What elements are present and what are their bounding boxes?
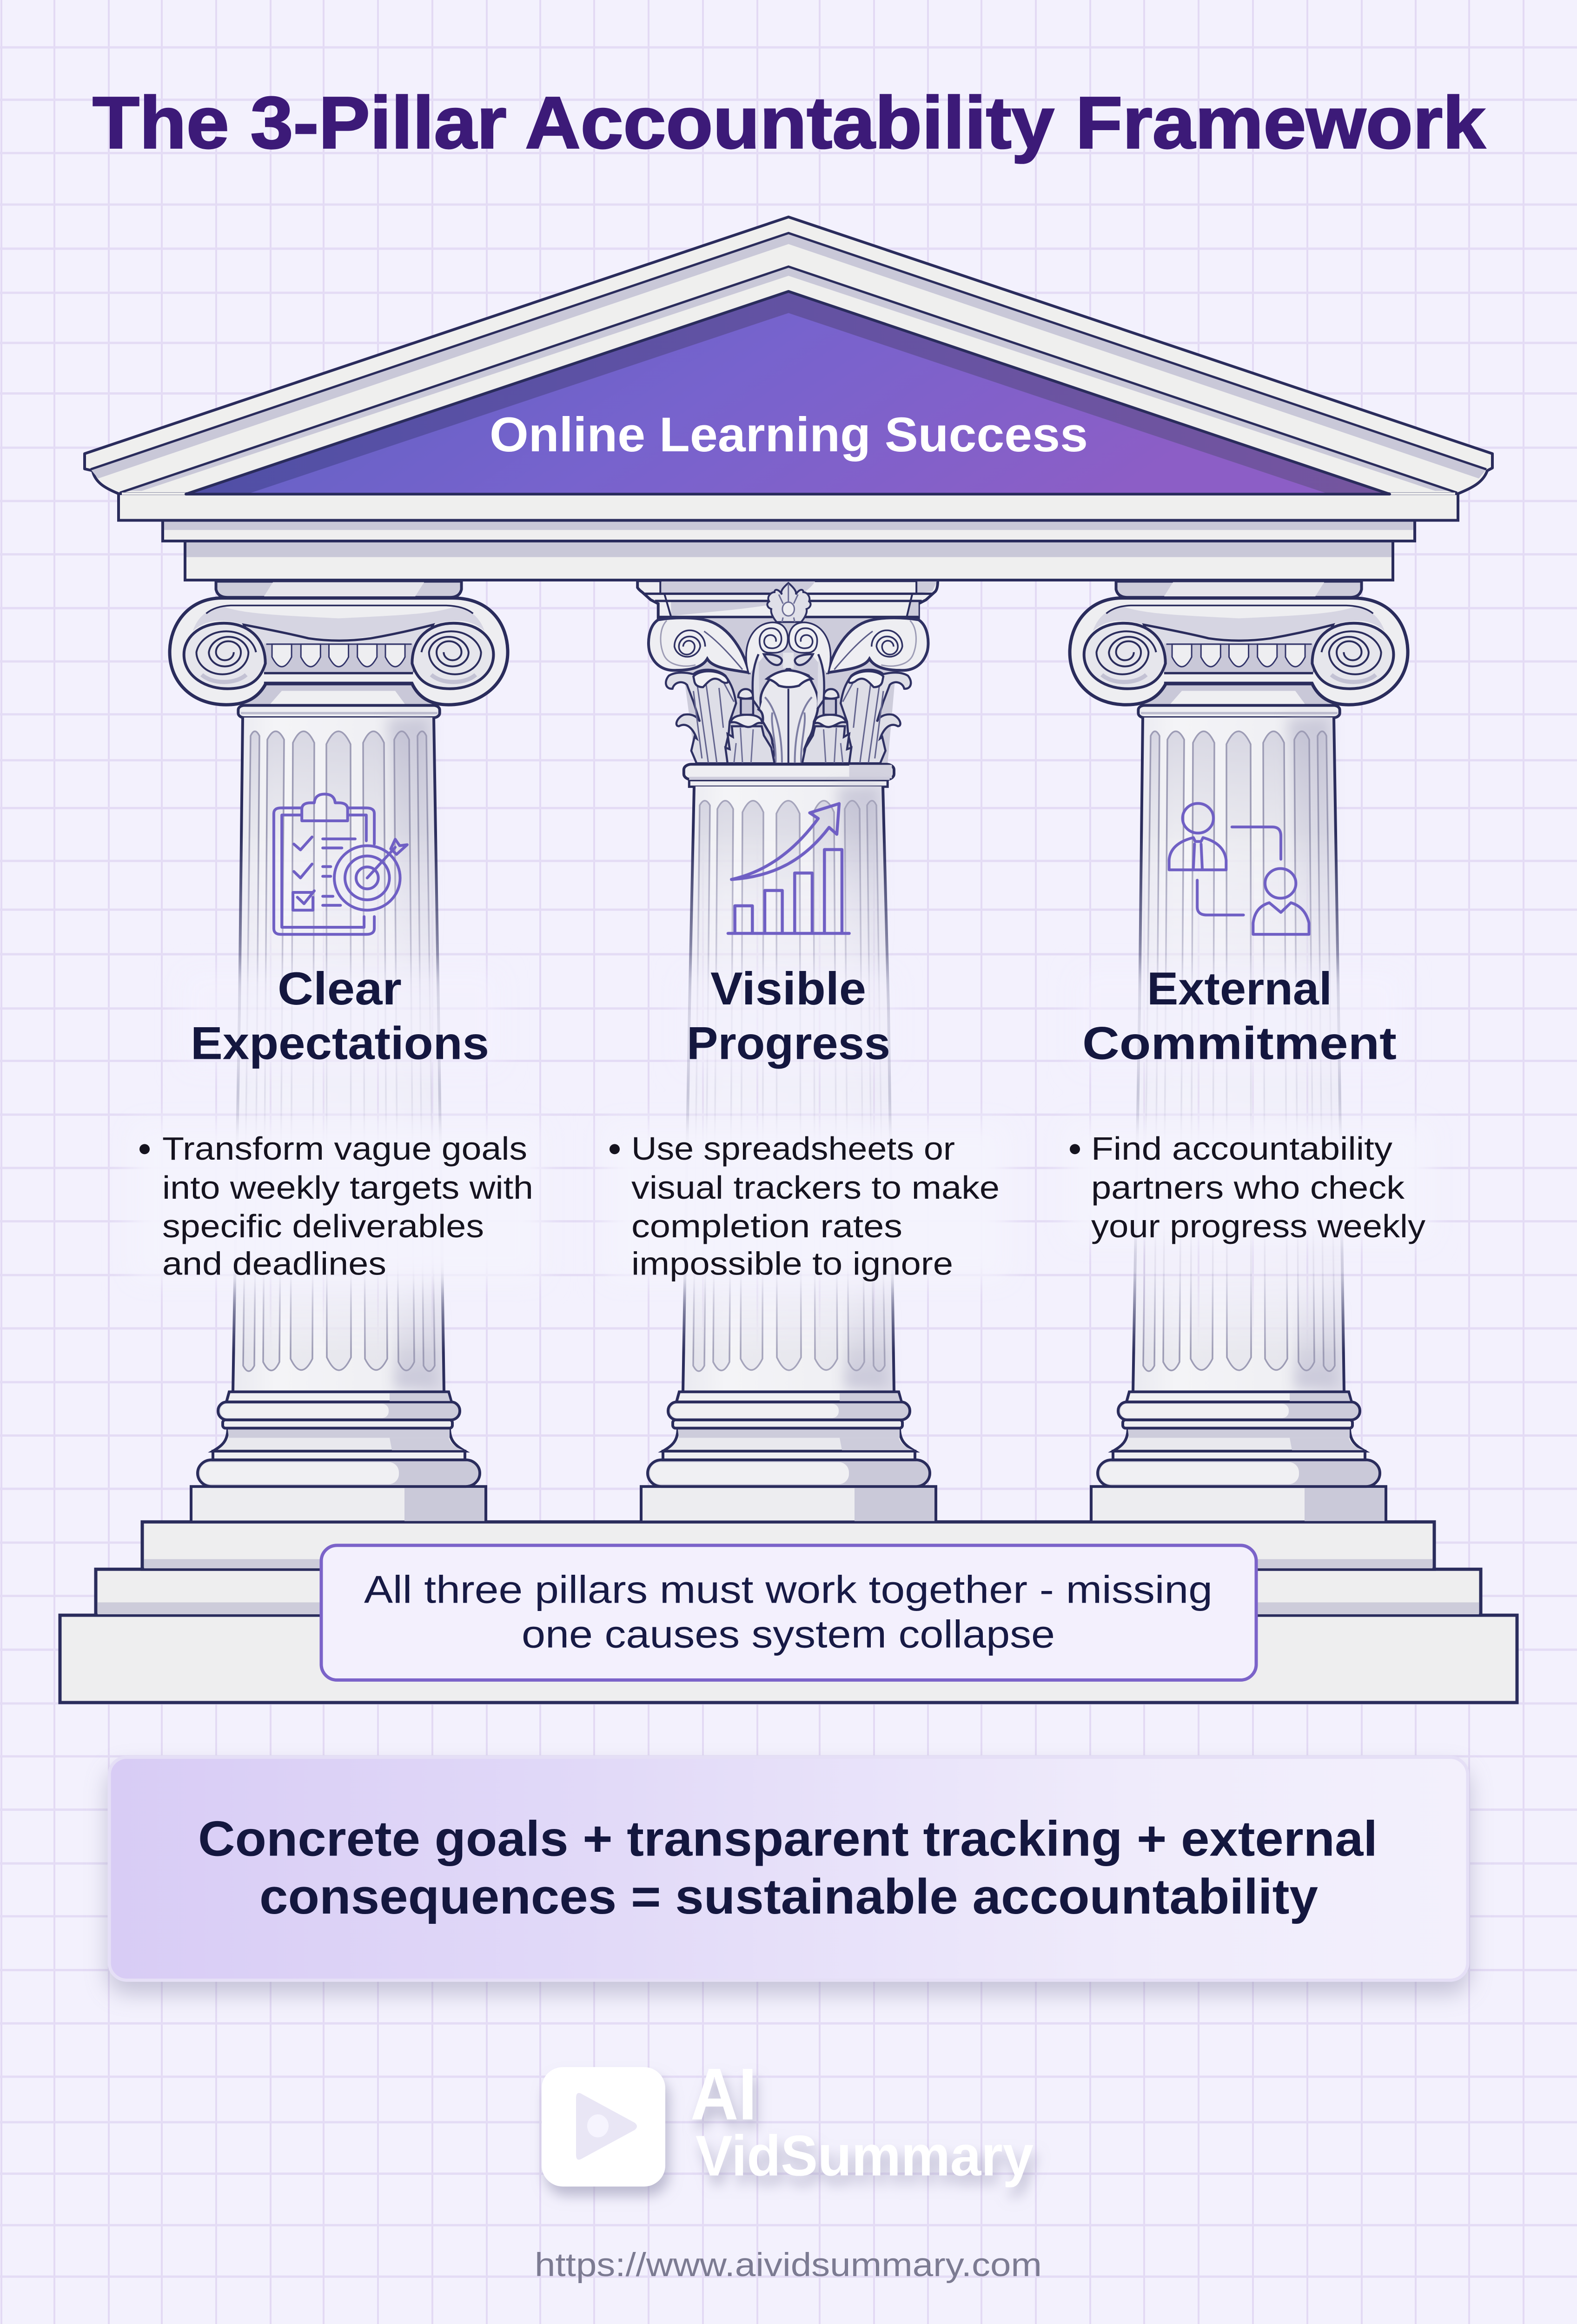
callout on steps: one causes system collapse xyxy=(522,1612,1055,1656)
tympanum xyxy=(186,291,1390,494)
capital xyxy=(170,581,508,718)
summary card xyxy=(109,1757,1468,1980)
website url: https://www.aividsummary.com xyxy=(535,2247,1042,2284)
pillar heading: External Commitment xyxy=(1082,963,1397,1069)
bullet text: visible progress: completion rates xyxy=(631,1208,902,1244)
callout on steps xyxy=(321,1545,1256,1680)
logo wordmark xyxy=(690,2053,1034,2188)
pillar heading: Visible Progress: Visible xyxy=(710,963,866,1015)
bullet text: clear expectations: Transform vague goals xyxy=(162,1130,527,1167)
logo xyxy=(542,2053,1034,2188)
bullet text: external commitment xyxy=(1070,1130,1425,1244)
capital xyxy=(637,581,938,787)
logo wordmark: VidSummary xyxy=(696,2124,1034,2188)
pediment cornice xyxy=(85,217,1492,494)
summary card: consequences = sustainable accountability xyxy=(259,1868,1318,1924)
icon: rising bar chart xyxy=(728,804,849,933)
icon: two people connected xyxy=(1169,804,1309,934)
pillar heading: Visible Progress xyxy=(687,963,890,1069)
bullet text: visible progress: impossible to ignore xyxy=(631,1246,953,1281)
bullet text: visible progress: visual trackers to make xyxy=(631,1169,1000,1206)
entablature bands xyxy=(119,487,1458,580)
pillar 1: ionic column xyxy=(170,581,508,1522)
bullet text: clear expectations xyxy=(139,1130,533,1281)
pillar heading: Clear Expectations: Clear xyxy=(278,963,402,1015)
capital xyxy=(1070,581,1408,718)
steps xyxy=(60,1522,1517,1703)
bullet text: visible progress xyxy=(610,1130,1000,1281)
callout on steps: All three pillars must work together - missing xyxy=(364,1568,1213,1611)
bullet text: external commitment: partners who check xyxy=(1091,1169,1405,1206)
pillar heading: External Commitment: Commitment xyxy=(1082,1018,1397,1069)
pediment label: Online Learning Success xyxy=(490,408,1088,462)
pillar heading: Visible Progress: Progress xyxy=(687,1018,890,1069)
bullet text: external commitment: your progress weekly xyxy=(1091,1208,1425,1244)
shaft xyxy=(641,786,936,1522)
icon: clipboard with target xyxy=(274,794,407,934)
pillar heading: External Commitment: External xyxy=(1147,963,1332,1015)
bullet text: clear expectations: specific deliverables xyxy=(162,1208,484,1244)
temple roof: pediment and entablature xyxy=(85,217,1492,580)
bullet text: visible progress: Use spreadsheets or xyxy=(631,1130,955,1167)
logo wordmark: AI xyxy=(690,2053,757,2135)
bullet text: clear expectations: and deadlines xyxy=(162,1246,386,1281)
logo icon: play symbol xyxy=(542,2067,665,2186)
pillar heading: Clear Expectations: Expectations xyxy=(191,1018,489,1069)
pillar heading: Clear Expectations xyxy=(191,963,489,1069)
shaft xyxy=(1091,718,1386,1522)
soft glow behind pillar text xyxy=(130,970,1432,1282)
shaft xyxy=(191,718,486,1522)
bullet text: external commitment: Find accountability xyxy=(1091,1130,1392,1167)
bullet text: clear expectations: into weekly targets with xyxy=(162,1169,533,1206)
title: The 3-Pillar Accountability Framework xyxy=(93,81,1486,164)
pillar 2: corinthian column xyxy=(637,581,938,1522)
pillar 3: ionic column xyxy=(1070,581,1408,1522)
summary card: Concrete goals + transparent tracking + external xyxy=(198,1811,1378,1866)
